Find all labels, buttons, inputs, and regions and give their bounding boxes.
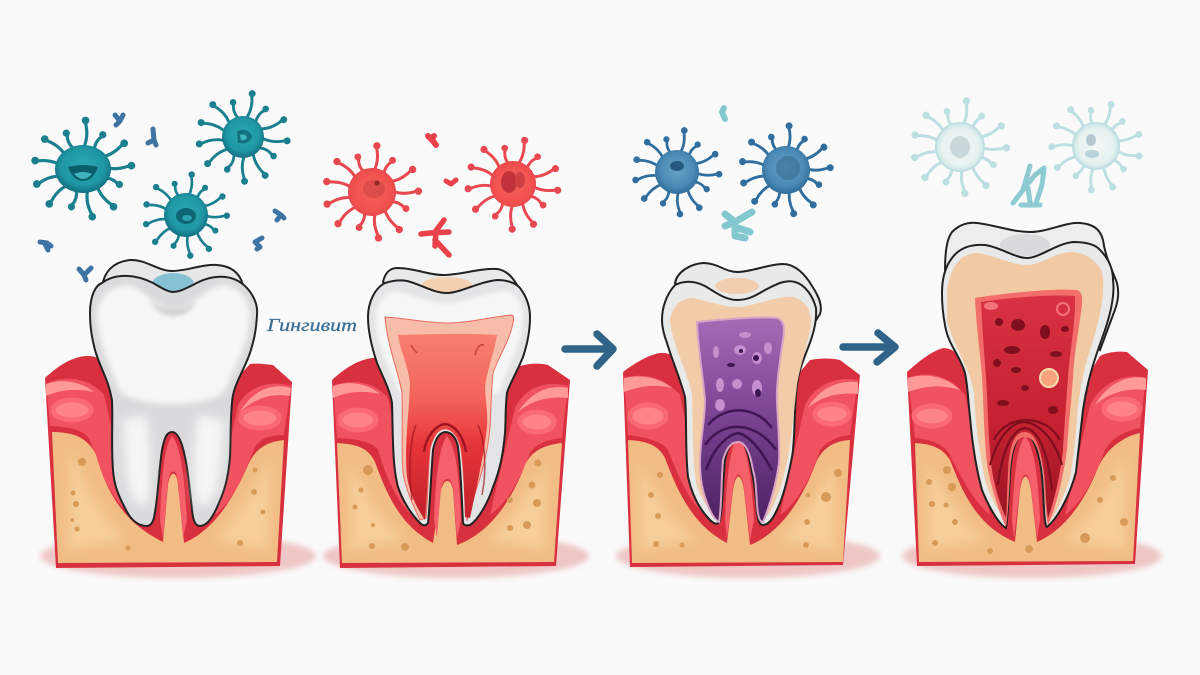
gum and bone block: stage 2 bbox=[332, 358, 570, 568]
fragments: blue-teal bbox=[40, 115, 284, 280]
shadow: stage 1 bbox=[40, 534, 316, 578]
tooth: stage 2 bbox=[368, 268, 530, 525]
bacteria group: pale bbox=[903, 85, 1157, 207]
virus: red left bbox=[317, 137, 427, 246]
virus: teal bottom bbox=[136, 165, 236, 264]
arrow: stage 2 to stage 3 bbox=[565, 334, 613, 366]
virus: pale right bbox=[1035, 85, 1157, 207]
tooth: stage 1 healthy white bbox=[90, 260, 257, 526]
virus: pale left bbox=[903, 90, 1017, 203]
virus: teal top right bbox=[186, 80, 300, 193]
panel: stage 3 purple pulp bbox=[616, 263, 880, 578]
fragments: red bbox=[421, 136, 456, 255]
virus: teal large bbox=[28, 114, 138, 223]
shadow: stage 2 bbox=[323, 534, 589, 578]
tooth: stage 4 bbox=[942, 223, 1118, 528]
gum and bone block: stage 3 bbox=[623, 353, 860, 567]
virus: red right bbox=[453, 124, 573, 243]
panel: stage 1 healthy tooth bbox=[40, 260, 316, 578]
panel: stage 2 red pulp bbox=[323, 268, 589, 578]
gum and bone block: stage 4 bbox=[907, 348, 1148, 566]
virus: blue right bbox=[735, 119, 837, 220]
fragments: pale bbox=[1013, 166, 1044, 205]
arrow: stage 3 to stage 4 bbox=[843, 333, 895, 362]
shadow: stage 4 bbox=[902, 534, 1162, 578]
fragments: pale blue bbox=[722, 108, 752, 238]
tooth: stage 3 bbox=[662, 263, 821, 525]
shadow: stage 3 bbox=[616, 534, 880, 578]
bacteria group: blue bbox=[624, 108, 837, 238]
label: gingivitis: Гингивит bbox=[266, 315, 357, 335]
bacteria group: red bbox=[317, 124, 573, 255]
bacteria group: teal bbox=[28, 80, 300, 280]
gum and bone block: stage 1 bbox=[45, 356, 292, 568]
panel: stage 4 dark red pulp bbox=[902, 223, 1162, 578]
virus: blue left bbox=[624, 119, 730, 224]
